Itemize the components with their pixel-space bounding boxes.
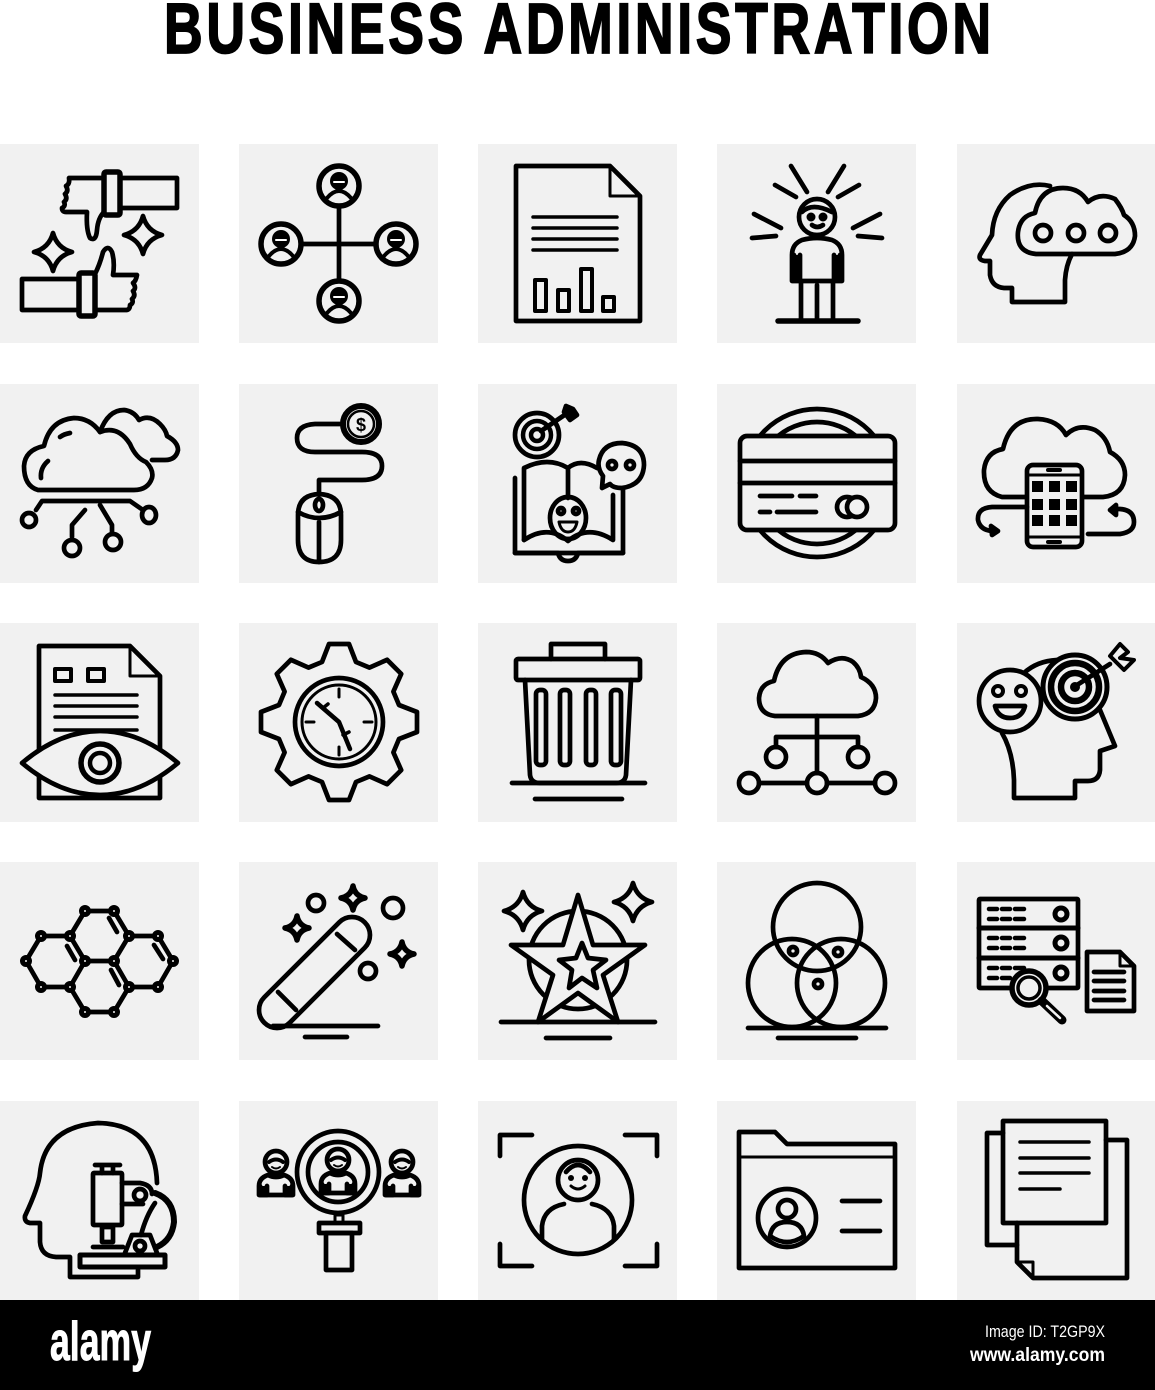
- icon: head with microscope: [25, 1123, 174, 1277]
- panel: cloud circuit: [0, 384, 199, 583]
- icon: excited person: [752, 166, 882, 321]
- icon: cloud and phone: [978, 419, 1134, 547]
- icon: mouse and coin: [297, 406, 382, 562]
- panel: venn diagram: [717, 862, 916, 1060]
- icon: star with sparkles: [501, 883, 655, 1038]
- panel: cloud and phone: [957, 384, 1155, 583]
- panel: documents: [957, 1101, 1155, 1300]
- icon: face in focus frame: [500, 1135, 657, 1266]
- panel: honeycomb: [0, 862, 199, 1060]
- icon: mouse and coin: $: [356, 415, 366, 435]
- panel: book with target: [478, 384, 677, 583]
- icon: book with target and speech bubble: [515, 406, 644, 561]
- icon: magnifier with people: [259, 1131, 419, 1270]
- icon: venn diagram: [748, 883, 886, 1038]
- panel: folder: [717, 1101, 916, 1300]
- panel: head with cloud: [957, 144, 1155, 343]
- panel: head with target: [957, 623, 1155, 822]
- icon: honeycomb molecule: [22, 908, 176, 1016]
- website: www.alamy.com: [969, 1345, 1105, 1366]
- icon: pencil and sparkles: [252, 886, 414, 1037]
- icon: head with thought cloud: [980, 185, 1135, 302]
- panel: report document: [478, 144, 677, 343]
- panel: people network: [239, 144, 438, 343]
- icon: report document: [516, 166, 640, 321]
- logo: alamy: alamy: [50, 1310, 151, 1372]
- panel: server search: [957, 862, 1155, 1060]
- panel: document with eye: [0, 623, 199, 822]
- icon: document with eye: [22, 646, 178, 798]
- icon: people network: [261, 166, 416, 321]
- icon: cloud circuit: [22, 410, 178, 556]
- panel: head with microscope: [0, 1101, 199, 1300]
- panel: gear clock: [239, 623, 438, 822]
- icon: head with target and smiley: [979, 644, 1134, 798]
- icon: gear with clock: [261, 644, 417, 800]
- panel: trash can: [478, 623, 677, 822]
- panel: credit card: [717, 384, 916, 583]
- icon: server, magnifier and document: [979, 899, 1134, 1020]
- panel: star: [478, 862, 677, 1060]
- icon: cloud network: [739, 652, 895, 793]
- icon: thumbs: [22, 172, 177, 316]
- panel: people search: [239, 1101, 438, 1300]
- panel: mouse and coin: [239, 384, 438, 583]
- panel: excited person: [717, 144, 916, 343]
- panel: face focus: [478, 1101, 677, 1300]
- icon: trash can: [512, 644, 645, 799]
- panel: thumbs up and down: [0, 144, 199, 343]
- panel: cloud network: [717, 623, 916, 822]
- panel: pencil: [239, 862, 438, 1060]
- icon: profile folder: [739, 1132, 895, 1268]
- image id: Image ID: T2GP9X: [985, 1322, 1105, 1341]
- icon: credit card: [740, 409, 895, 557]
- footer bar: [0, 1300, 1155, 1390]
- icon: stacked documents: [987, 1121, 1127, 1278]
